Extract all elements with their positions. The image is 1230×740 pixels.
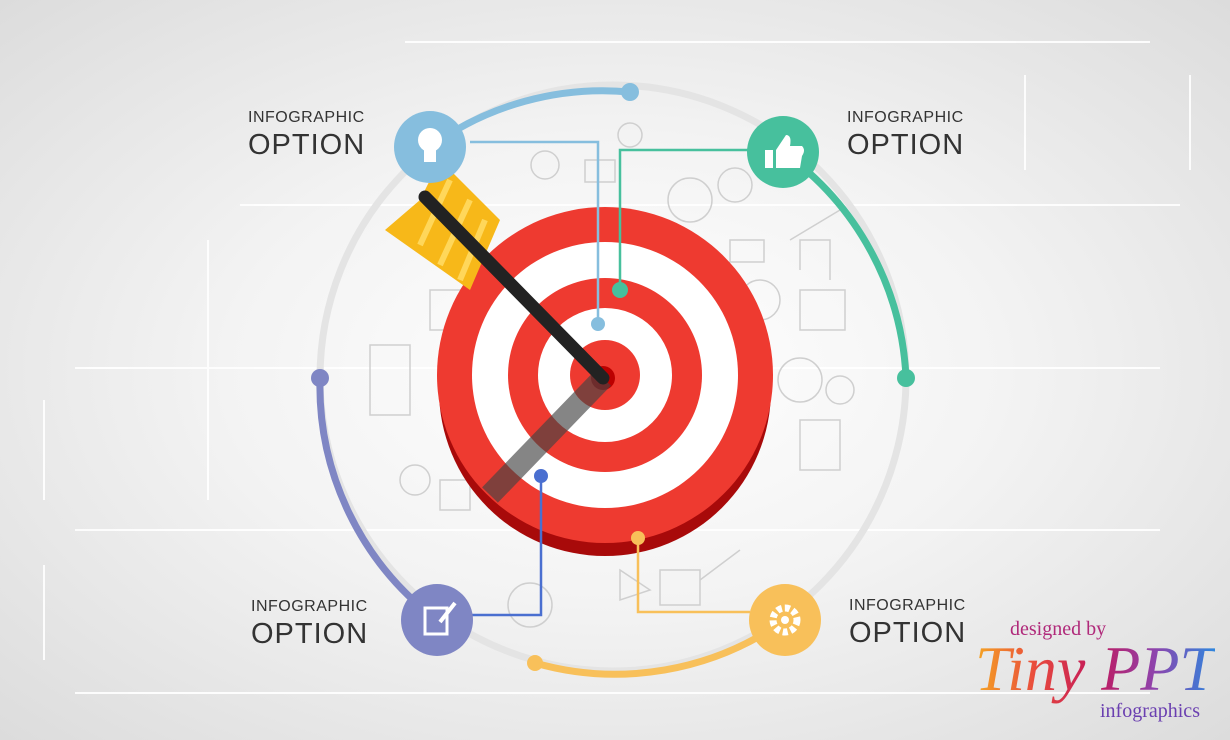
label: bottom-left: INFOGRAPHIC xyxy=(251,598,368,615)
arrow xyxy=(385,160,603,495)
label: bottom-right xyxy=(849,597,966,649)
logo: infographics xyxy=(1100,700,1200,722)
icon: thumbs up xyxy=(747,116,819,188)
connector lines xyxy=(470,142,780,615)
icon: edit xyxy=(401,584,473,656)
logo: Tiny PPT xyxy=(975,633,1215,704)
outer gray ring xyxy=(320,85,906,671)
doodle background xyxy=(370,123,854,627)
label: top-right xyxy=(847,109,964,161)
label: top-left xyxy=(248,109,365,161)
arc: green xyxy=(783,152,906,378)
label: bottom-right: OPTION xyxy=(849,617,966,649)
label: top-right: OPTION xyxy=(847,129,964,161)
target xyxy=(437,207,773,556)
label: bottom-left xyxy=(251,598,368,650)
label: top-left: OPTION xyxy=(248,129,365,161)
logo: designed by xyxy=(1010,618,1106,640)
arc: blue xyxy=(430,91,630,147)
arc: purple xyxy=(320,378,437,620)
label: bottom-right: INFOGRAPHIC xyxy=(849,597,966,614)
icon: lightbulb xyxy=(394,111,466,183)
label: top-left: INFOGRAPHIC xyxy=(248,109,365,126)
arc: orange xyxy=(535,620,785,674)
icon: gear xyxy=(749,584,821,656)
logo xyxy=(975,618,1215,722)
label: bottom-left: OPTION xyxy=(251,618,368,650)
label: top-right: INFOGRAPHIC xyxy=(847,109,964,126)
